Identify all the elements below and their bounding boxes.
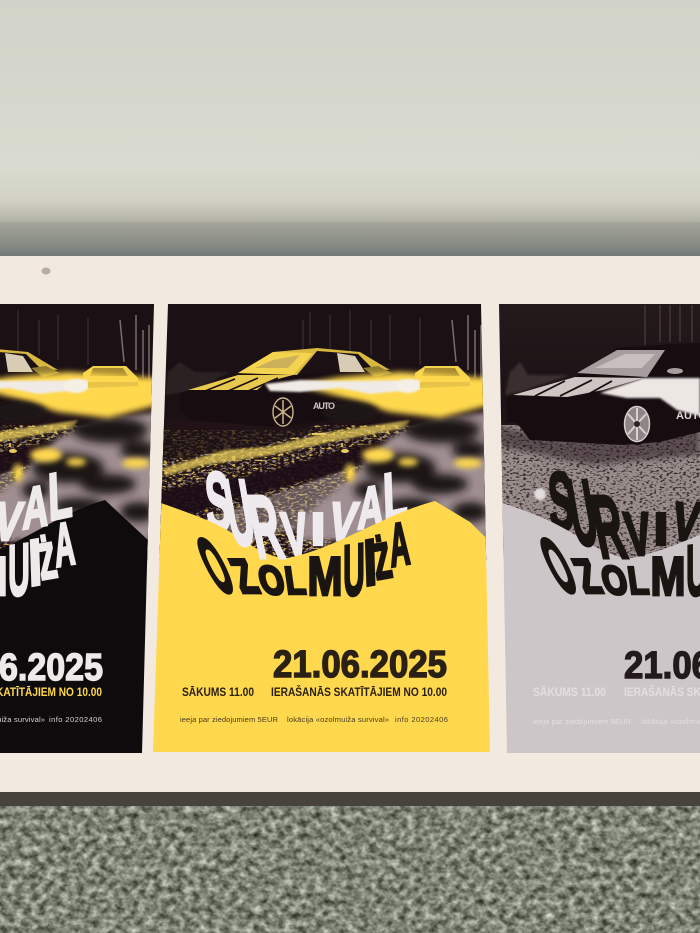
middle poster title black — [197, 522, 412, 598]
right poster title lower: M — [651, 547, 685, 607]
wall — [0, 0, 700, 222]
middle poster title black: Ż — [369, 532, 395, 590]
shadow band above board — [0, 222, 700, 257]
right poster title lower — [540, 537, 700, 598]
middle poster yellow shape — [150, 501, 495, 760]
middle poster title white: L — [382, 456, 408, 535]
left poster title: U — [8, 528, 30, 612]
spectator arrival: IERAŠANĀS SKATĪTĀJIEM NO 10.00 — [271, 684, 447, 699]
right poster footer: ieeja par ziedojumiem 5EUR — [533, 717, 632, 726]
middle poster photo — [159, 304, 486, 560]
left poster footer — [0, 716, 102, 722]
right poster overlap letters — [567, 478, 649, 560]
right poster title lower: O — [596, 558, 632, 603]
middle poster title black: Z — [222, 549, 267, 604]
middle poster title black: I — [362, 525, 378, 601]
middle poster title black: M — [308, 547, 342, 607]
right poster title upper: S — [545, 455, 577, 548]
speckled floor — [0, 806, 700, 933]
panel: right pale poster — [495, 300, 700, 760]
right poster photo — [495, 300, 700, 560]
middle poster title black: O — [253, 558, 289, 603]
middle poster title white: I — [310, 503, 326, 555]
middle poster title black: O — [184, 524, 247, 609]
start time: SĀKUMS 11.00 — [182, 685, 254, 699]
middle poster title white: U — [218, 461, 261, 566]
middle poster title black: L — [282, 559, 308, 603]
right poster footer — [534, 718, 699, 726]
middle poster title white — [206, 470, 408, 558]
middle poster date: 21.06.2025 — [273, 644, 447, 686]
right poster title upper — [549, 470, 700, 558]
panel: left black poster — [0, 304, 154, 753]
middle poster footer: ieeja par ziedojumiem 5EUR — [180, 715, 279, 724]
left poster date: 6.2025 — [0, 647, 103, 689]
right poster title lower: Z — [565, 549, 610, 604]
AUTO lettering: AUTO — [313, 401, 335, 411]
right poster overlap letters: U — [561, 461, 604, 566]
left poster title — [0, 472, 76, 598]
right poster pale shape — [495, 503, 700, 760]
right poster title lower: O — [527, 524, 590, 609]
board lower edge — [0, 792, 700, 806]
board mounting hole — [42, 268, 50, 274]
redraw of white letters that overlap yellow: U — [218, 461, 261, 566]
redraw of white letters that overlap yellow — [224, 478, 288, 560]
right poster title upper: R — [584, 478, 634, 578]
middle poster footer — [180, 716, 448, 724]
right poster title upper: I — [653, 503, 669, 555]
right poster title upper: U — [561, 461, 604, 566]
left poster title: I — [27, 525, 43, 601]
right poster overlap letters: R — [584, 478, 634, 578]
left poster title: Ż — [34, 532, 60, 590]
middle poster title white: V — [278, 500, 313, 568]
middle poster footer: lokācija «ozolmuiža survival» — [287, 715, 389, 724]
left poster title: A — [22, 473, 50, 542]
left poster title: A — [52, 508, 77, 580]
middle poster footer: info 20202406 — [395, 715, 448, 724]
right poster title lower: L — [625, 559, 651, 603]
left poster title: L — [47, 456, 73, 535]
middle poster title white: V — [324, 493, 362, 552]
left poster black shape — [0, 500, 148, 760]
middle poster title white: S — [202, 455, 234, 548]
right poster title upper: V — [621, 500, 656, 568]
panel: middle yellow poster — [140, 300, 500, 760]
redraw of white letters that overlap yellow: R — [241, 478, 291, 578]
right poster start time: SĀKUMS 11.00 — [533, 685, 606, 699]
middle poster title black: A — [387, 508, 412, 580]
left poster photo — [0, 300, 168, 560]
middle poster title black: U — [343, 528, 365, 612]
poster board — [0, 256, 700, 793]
right poster overlap letters: V — [621, 500, 656, 568]
left poster footer: info 20202406 — [49, 715, 102, 724]
middle poster title white: A — [357, 473, 385, 542]
middle poster title white: R — [241, 478, 291, 578]
